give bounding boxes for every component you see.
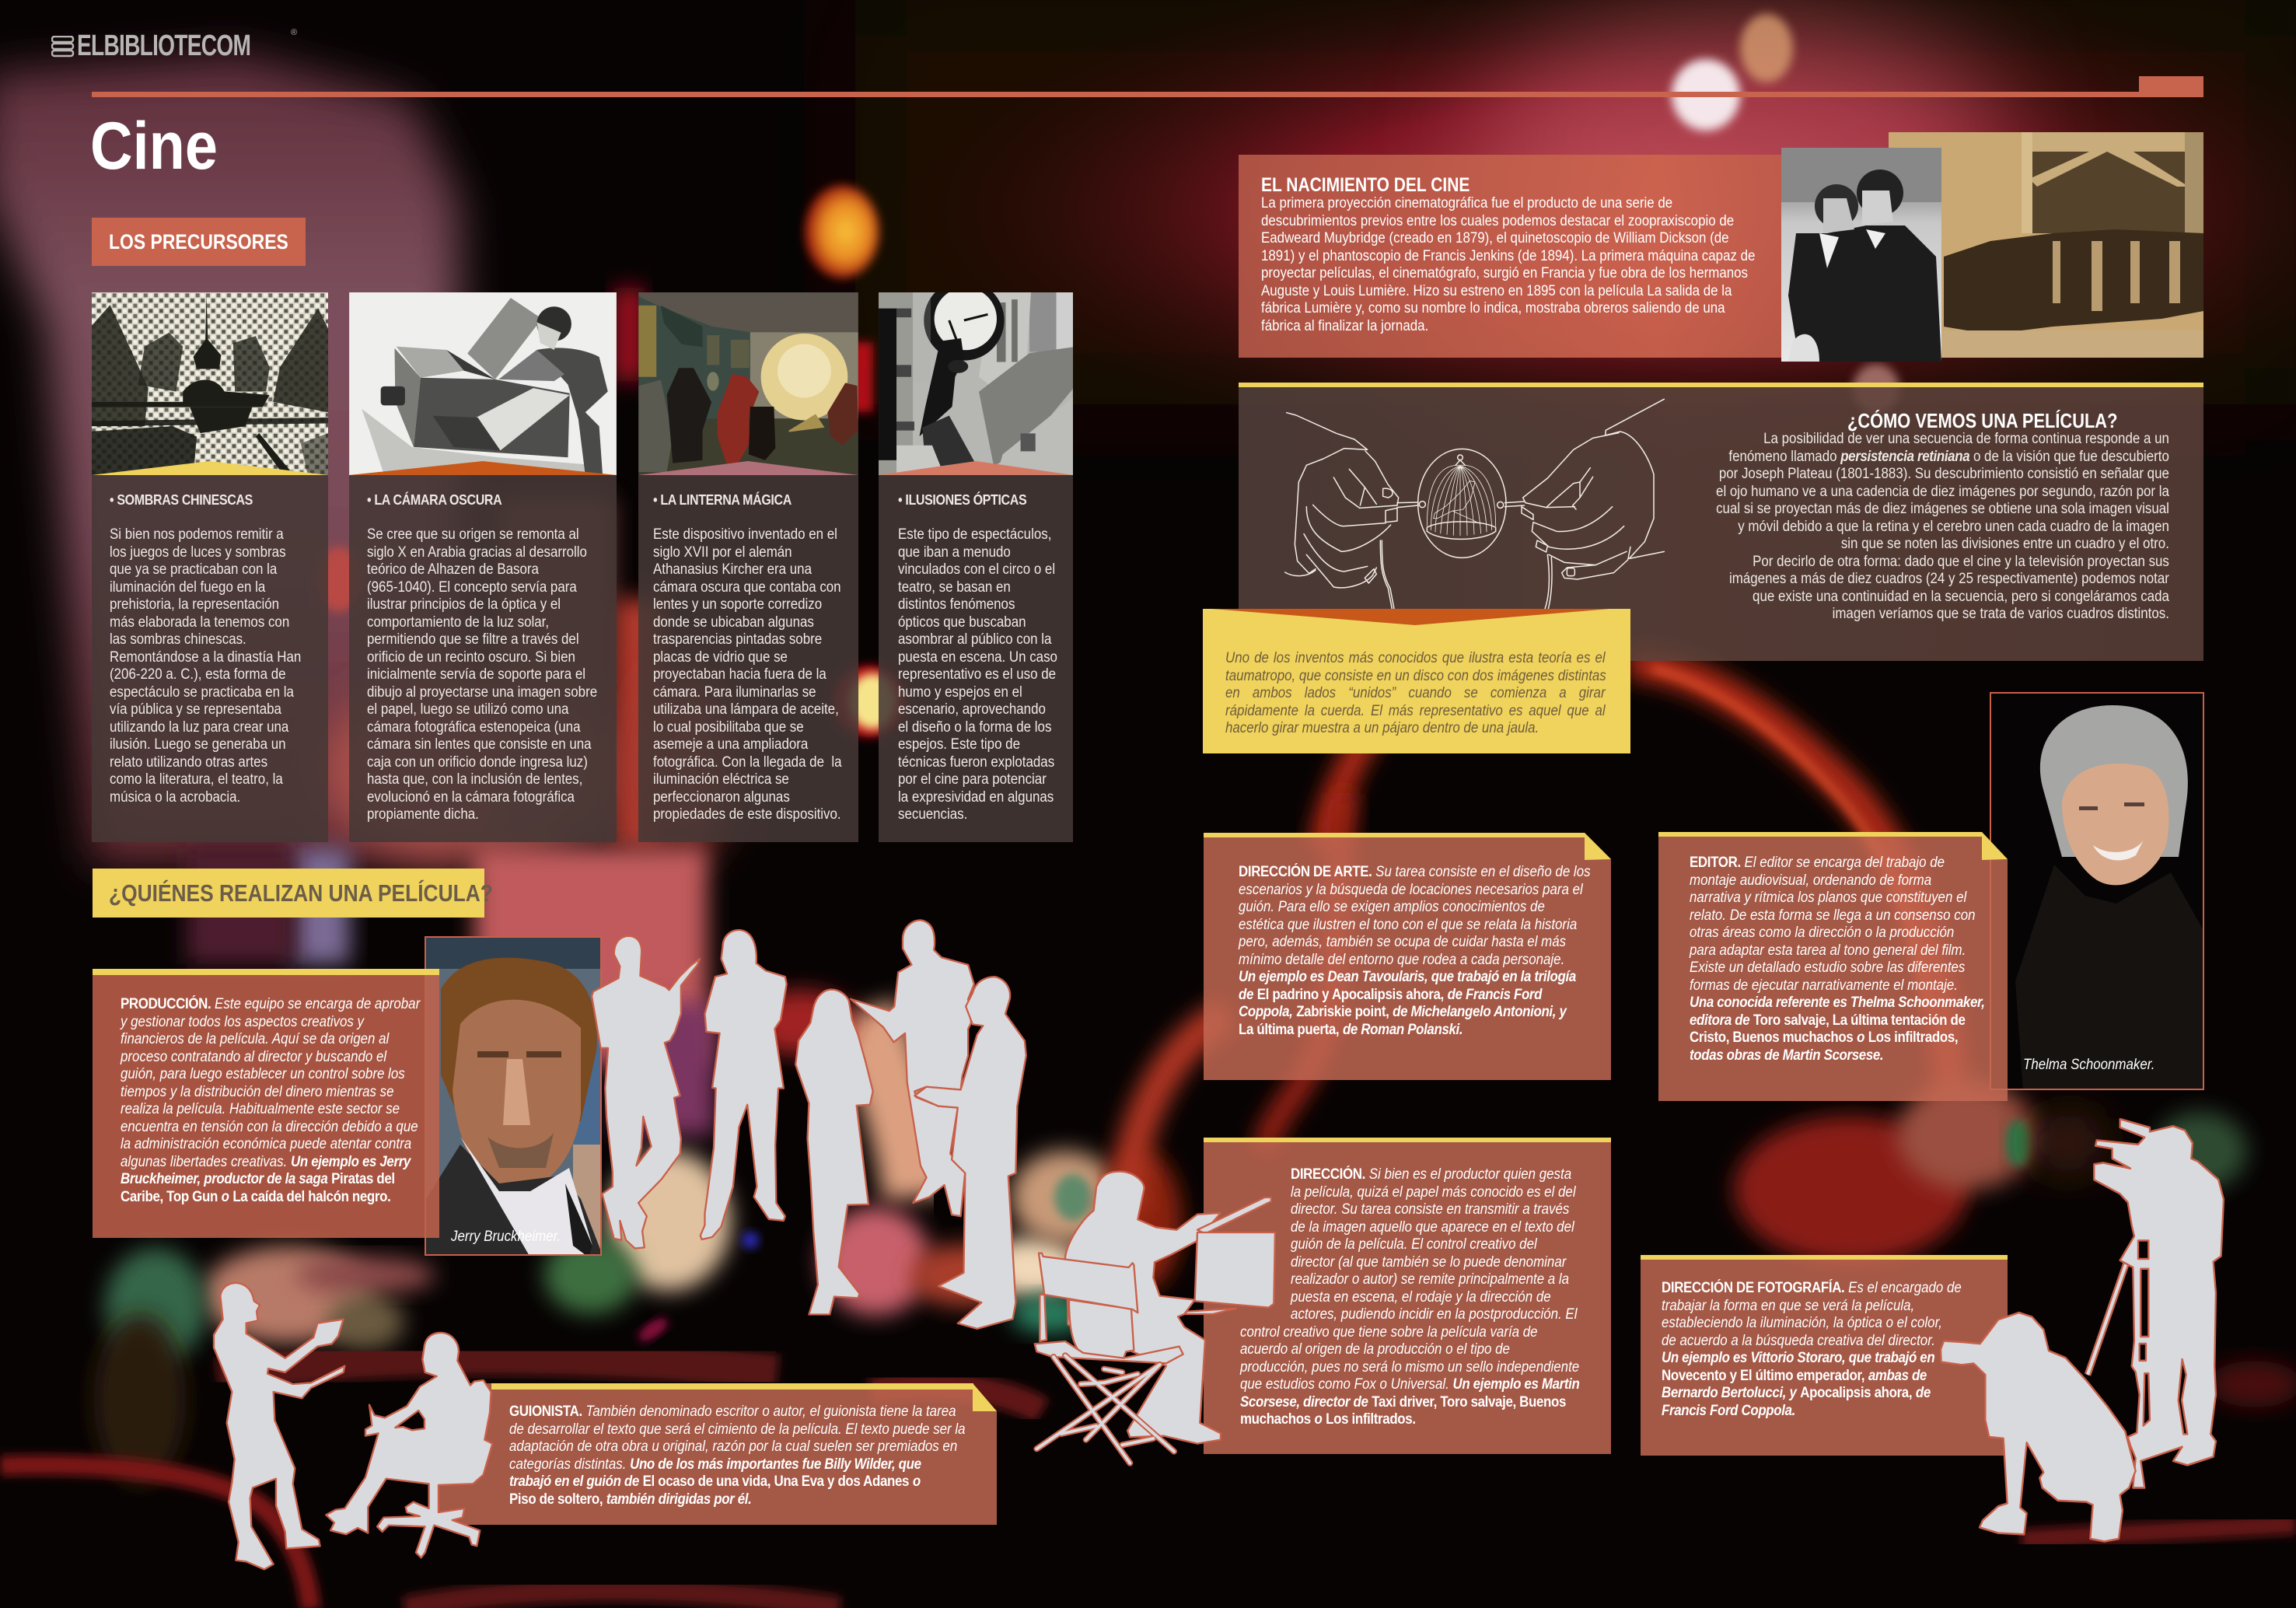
panel: editor: otras áreas como la dirección o la producción [1690,925,1954,941]
logo: ® [291,28,297,37]
heading: quiénes realizan una película [93,869,484,918]
panel: ilusiones ópticas: la expresividad en algunas [898,788,1054,806]
panel: la cámara oscura: evolucionó en la cámara fotográfica [367,788,575,806]
panel: ilusiones ópticas [879,292,1073,842]
panel: la cámara oscura: teórico de Alhazen de Basora [367,561,539,578]
panel: la cámara oscura: propiamente dicha. [367,806,479,823]
panel: la linterna mágica: asemeje a una ampliadora [653,736,808,753]
panel: sombras chinescas: (206-220 a. C.), esta forma de [110,666,286,683]
panel: guionista: adaptación de otra obra u original, razón por la cual suelen ser premiados en [509,1438,957,1455]
image: ilusiones ópticas [879,292,1073,475]
panel: el nacimiento del cine: proyectar películas, el cinematógrafo, surgió en Francia y fue obra de los hermanos [1261,265,1748,281]
panel: editor [1658,832,2008,1101]
panel: la cámara oscura: hasta que, con la inclusión de lentes, [367,771,582,788]
panel: la linterna mágica: lentes y un soporte corredizo [653,596,822,613]
panel: editor: formas de ejecutar narrativamente el montaje. [1690,977,1958,994]
photo: hermanos Lumière [1781,148,1941,362]
panel: dirección de arte: DIRECCIÓN DE ARTE. Su tarea consiste en el diseño de los [1239,864,1591,880]
panel: ilusiones ópticas: Este tipo de espectáculos, [898,526,1051,543]
silhouette: mujer con tableta [214,1283,344,1569]
panel: ilusiones ópticas: • ILUSIONES ÓPTICAS [898,492,1026,508]
panel: la linterna mágica: Athanasius Kircher era una [653,561,812,578]
panel: sombras chinescas [92,292,328,842]
panel: sombras chinescas: las sombras chinescas. [110,631,246,648]
panel: ilusiones ópticas: el diseño o la forma de los [898,718,1051,736]
silhouettes: grupo de cinco personas [592,920,1026,1329]
panel: dirección: puesta en escena, el rodaje y la dirección de [1291,1289,1551,1305]
photo: salida de la fábrica [1889,132,2203,358]
panel: dirección: de la imagen aquello que aparece en el texto del [1291,1219,1574,1235]
photo: Thelma Schoonmaker [1990,692,2204,1090]
panel: el nacimiento del cine: fábrica al finalizar la jornada. [1261,317,1428,334]
panel: cómo vemos una película: fenómeno llamado persistencia retiniana o de la visión que fue descubierto [1728,448,2169,465]
panel: la linterna mágica: cámara oscura que contaba con [653,579,841,596]
callout: taumatropo: Uno de los inventos más conocidos que ilustra esta teoría es el [1225,650,1606,666]
callout: taumatropo [1203,609,1630,753]
panel: el nacimiento del cine: 1891) y el phantoscopio de Francis Jenkins (de 1894). La primera máquina capaz de [1261,247,1755,264]
panel: dirección: DIRECCIÓN. Si bien es el productor quien gesta [1291,1166,1571,1183]
panel: cómo vemos una película: imágenes a más de diez cuadros (24 y 25 respectivamente) podemos notar [1729,571,2169,587]
panel: sombras chinescas: Remontándose a la dinastía Han [110,648,301,666]
panel: dirección: actores, pudiendo incidir en la postproducción. El [1291,1306,1577,1323]
panel: la linterna mágica: siglo XVII por el alemán [653,544,792,560]
panel: dirección de arte: La última puerta, de Roman Polanski. [1239,1022,1463,1037]
panel: cómo vemos una película: Por decirlo de otra forma: dado que el cine y la televisión proyectan sus [1753,554,2169,569]
panel: el nacimiento del cine: Eadweard Muybridge (creado en 1879), el quinetoscopio de William Dickson (de [1261,230,1729,246]
panel: producción: encuentra en tensión con la dirección debido a que [121,1118,418,1135]
panel: ilusiones ópticas: escenario, aprovechando [898,701,1046,718]
panel: la linterna mágica: utilizaba una lámpara de aceite, [653,701,839,718]
panel: producción: la administración económica puede atentar contra [121,1136,411,1152]
panel: la linterna mágica: donde se ubicaban algunas [653,614,814,630]
panel: dirección de fotografía [1641,1255,2008,1456]
panel: sombras chinescas: utilizando la luz para crear una [110,718,288,736]
panel: producción: Bruckheimer, productor de la saga Piratas del [121,1171,395,1187]
panel: el nacimiento del cine: descubrimientos previos entre los cuales podemos destacar el zoopraxiscopio de [1261,213,1734,229]
panel: dirección [1204,1138,1611,1454]
panel: guionista: GUIONISTA. También denominado escritor o autor, el guionista tiene la tarea [509,1404,956,1420]
panel: ilusiones ópticas: humo y espejos en el [898,684,1022,700]
callout: taumatropo: hacerlo girar muestra a un pájaro dentro de una jaula. [1225,720,1539,736]
panel: editor: editora de Toro salvaje, La última tentación de [1690,1012,1965,1028]
heading: quiénes realizan una película: ¿QUIÉNES REALIZAN UNA PELÍCULA? [109,879,493,907]
panel: ilusiones ópticas: espejos. Este tipo de [898,736,1020,753]
panel: cómo vemos una película: el ojo humano ve a una cadencia de diez imágenes por segundo, razón por la [1716,484,2169,499]
silhouette: fotógrafo agachado [1941,1313,2136,1542]
panel: el nacimiento del cine: Auguste y Louis Lumière. Hizo su estreno en 1895 con la película La salida de la [1261,283,1732,299]
panel: dirección: realizador o autor) se remite principalmente a la [1291,1271,1569,1288]
panel: ilusiones ópticas: asombrar al público con la [898,631,1051,648]
silhouette: director en silla [1035,1172,1275,1463]
panel: la cámara oscura: cámara fotográfica estenopeica (una [367,718,580,736]
panel: dirección: director (al que también se lo puede denominar [1291,1253,1566,1271]
panel: el nacimiento del cine: fábrica Lumière y, como su nombre lo indica, mostraba obreros saliendo de una [1261,300,1725,316]
panel: cómo vemos una película: que existe una continuidad en la secuencia, pero si congeláramos cada [1753,588,2169,605]
panel: la cámara oscura: siglo X en Arabia gracias al desarrollo [367,544,587,560]
panel: dirección de fotografía: DIRECCIÓN DE FOTOGRAFÍA. Es el encargado de [1662,1280,1962,1296]
panel: dirección: la película, quizá el papel más conocido es el del [1291,1183,1576,1201]
heading: los precursores [92,218,306,266]
panel: el nacimiento del cine: La primera proyección cinematográfica fue el producto de una serie de [1261,195,1672,211]
panel: ilusiones ópticas: que iban a menudo [898,544,1011,560]
callout: taumatropo: taumatropo, que consiste en un disco con dos imágenes distintas [1225,667,1606,684]
image: sombras chinescas [92,292,328,475]
panel: dirección de arte: guión. Para ello se exigen amplios conocimientos de [1239,899,1545,915]
panel: dirección: acuerdo al origen de la producción o el tipo de [1240,1341,1510,1358]
heading: los precursores: LOS PRECURSORES [109,230,288,253]
panel: producción: proceso contratando al director y buscando el [121,1048,386,1065]
panel: la cámara oscura: el papel, luego se utilizó como una [367,701,568,718]
panel: guionista: trabajó en el guión de El ocaso de una vida, Una Eva y dos Adanes o [509,1473,921,1490]
panel: editor: todas obras de Martin Scorsese. [1690,1047,1883,1064]
panel: dirección: producción, pues no será lo mismo un sello independiente [1240,1359,1579,1375]
panel: dirección de arte: Un ejemplo es Dean Tavoularis, que trabajó en la trilogía [1239,969,1576,985]
panel: ilusiones ópticas: teatro, se basan en [898,579,1011,596]
panel: sombras chinescas: música o la acrobacia. [110,788,240,806]
panel: producción: y gestionar todos los aspectos creativos y [121,1014,364,1029]
panel: dirección de fotografía: estableciendo la iluminación, la óptica o el color, [1662,1315,1942,1331]
panel: sombras chinescas: • SOMBRAS CHINESCAS [110,492,253,508]
panel: sombras chinescas: que ya se practicaban con la [110,561,277,578]
panel: la linterna mágica: cámara. Para iluminarlas se [653,684,816,700]
panel: producción: PRODUCCIÓN. Este equipo se encarga de aprobar [121,996,420,1012]
panel: sombras chinescas: ilusión. Luego se generaba un [110,736,286,753]
panel: ilusiones ópticas: por el cine para potenciar [898,771,1047,788]
panel: ilusiones ópticas: técnicas fueron explotadas [898,754,1054,770]
title: Cine [90,109,218,184]
panel: dirección de arte: pero, además, también se ocupa de cuidar hasta el más [1239,934,1566,950]
panel: la linterna mágica: iluminación eléctrica se [653,771,789,788]
panel: la linterna mágica: • LA LINTERNA MÁGICA [653,492,792,508]
logo: ELBIBLIOTECOM [77,30,250,62]
panel: dirección de fotografía: Bernardo Bertolucci, y Apocalipsis ahora, de [1662,1385,1931,1401]
panel: producción: algunas libertades creativas. Un ejemplo es Jerry [121,1154,411,1169]
panel: sombras chinescas: iluminación del fuego en la [110,579,265,596]
panel: cómo vemos una película: imagen veríamos que se trata de varios cuadros distintos. [1833,606,2169,622]
panel: guionista: de desarrollar el texto que será el cimiento de la película. El texto puede ser la [509,1421,966,1437]
panel: cómo vemos una película: y móvil debido a que la retina y el cerebro unen cada cuadro de la imagen [1738,518,2169,535]
panel: editor: narrativa y rítmica los planos que constituyen el [1690,890,1966,906]
panel: cómo vemos una película: cual si se proyectan más de diez imágenes se obtiene una sola imagen visual [1716,501,2169,517]
panel: la cámara oscura: Se cree que su origen se remonta al [367,526,579,543]
panel: ilusiones ópticas: distintos fenómenos [898,596,1015,613]
image: linterna mágica [638,292,858,475]
panel: dirección: muchachos o Los infiltrados. [1240,1411,1416,1428]
panel: producción [93,969,439,1238]
icon: taumatropo manos [1244,389,1679,609]
panel: la linterna mágica: proyectaban hacia fuera de la [653,666,826,683]
panel: sombras chinescas: espectáculo se practicaba en la [110,684,294,700]
callout: taumatropo: en ambos lados “unidos” cuando se comienza a girar [1225,685,1606,701]
panel: la cámara oscura: permitiendo que se filtre a través del [367,631,579,648]
panel: cómo vemos una película [1239,383,2203,661]
panel: guionista [439,1383,997,1525]
panel: la cámara oscura [349,292,617,842]
panel: guionista: categorías distintas. Uno de los más importantes fue Billy Wilder, que [509,1456,921,1473]
panel: el nacimiento del cine [1239,155,1798,358]
panel: dirección de fotografía: trabajar la forma en que se verá la película, [1662,1297,1914,1314]
panel: editor: Existe un detallado estudio sobre las diferentes [1690,960,1965,976]
panel: sombras chinescas: relato utilizando otras artes [110,754,267,770]
photo: Jerry Bruckheimer: Jerry Bruckheimer. [451,1229,561,1245]
photo: Jerry Bruckheimer [425,936,602,1256]
panel: sombras chinescas: vía pública y se representaba [110,701,281,718]
panel: ilusiones ópticas: representativo es el uso de [898,666,1056,683]
panel: dirección: director. Su tarea consiste en transmitir a través [1291,1201,1569,1218]
panel: ilusiones ópticas: vinculados con el circo o el [898,561,1055,578]
panel: la linterna mágica: lo cual posibilitaba que se [653,718,804,736]
panel: editor: para adaptar esta tarea al tono general del film. [1690,942,1966,958]
panel: dirección de arte: estética que ilustren el tono con el que se relata la historia [1239,916,1577,933]
panel: la cámara oscura: ilustrar principios de la óptica y el [367,596,561,613]
panel: la cámara oscura: (965-1040). El concepto servía para [367,579,577,596]
panel: la cámara oscura: dibujo al proyectarse una imagen sobre [367,684,597,700]
panel: dirección de fotografía: de acuerdo a la búsqueda creativa del director. [1662,1333,1935,1348]
panel: dirección: Scorsese, director de Taxi driver, Toro salvaje, Buenos [1240,1393,1566,1410]
logo [51,28,297,62]
panel: cómo vemos una película: La posibilidad de ver una secuencia de forma continua responde a un [1763,431,2169,447]
silhouette: camarógrafo con trípode [2088,1119,2224,1487]
panel: la cámara oscura: caja con un orificio donde ingresa luz) [367,754,588,770]
panel: editor: Cristo, Buenos muchachos o Los infiltrados, [1690,1029,1958,1046]
panel: la linterna mágica: placas de vidrio que se [653,648,788,666]
panel: la linterna mágica: propiedades de este dispositivo. [653,806,841,823]
panel: producción: financieros de la película. Aquí se da origen al [121,1031,389,1047]
callout: taumatropo: rápidamente la cuerda. El más representativo es aquel que al [1225,703,1606,718]
image: cámara oscura [349,292,617,475]
panel: la linterna mágica: trasparencias pintadas sobre [653,631,822,648]
panel: la linterna mágica: fotográfica. Con la llegada de la [653,754,842,770]
panel: dirección de arte [1204,833,1611,1080]
panel: editor: montaje audiovisual, ordenando de forma [1690,872,1931,888]
panel: dirección: guión de la película. El control creativo del [1291,1236,1537,1253]
panel: guionista: Piso de soltero, también dirigidas por él. [509,1491,751,1507]
panel: editor: relato. De esta forma se llega a un consenso con [1690,907,1976,924]
panel: dirección de arte: mínimo detalle del entorno que rodea a cada personaje. [1239,952,1564,967]
silhouette: mujer sentada en silla [326,1333,492,1557]
panel: dirección de arte: de El padrino y Apocalipsis ahora, de Francis Ford [1239,986,1542,1003]
panel: la linterna mágica: perfeccionaron algunas [653,788,790,806]
panel: dirección de fotografía: Novecento y El último emperador, ambas de [1662,1367,1927,1384]
panel: la cámara oscura: inicialmente servía de soporte para el [367,666,585,683]
panel: producción: realiza la película. Habitualmente este sector se [121,1101,400,1117]
panel: la linterna mágica: Este dispositivo inventado en el [653,526,837,543]
panel: sombras chinescas: como la literatura, el teatro, la [110,771,283,788]
panel: la cámara oscura: orificio de un recinto oscuro. Si bien [367,648,575,666]
panel: dirección de arte: Coppola, Zabriskie point, de Michelangelo Antonioni, y [1239,1004,1567,1020]
panel: dirección: que estudios como Fox o Universal. Un ejemplo es Martin [1240,1376,1579,1393]
hair arcs right [1629,662,1952,1197]
panel: producción: guión, para luego establecer un control sobre los [121,1066,405,1082]
panel: cómo vemos una película: sin que se noten las divisiones entre un cuadro y el otro. [1841,536,2169,552]
panel: editor: EDITOR. El editor se encarga del trabajo de [1690,855,1945,871]
panel: la linterna mágica [638,292,858,842]
panel: ilusiones ópticas: secuencias. [898,806,967,823]
top rule with tab [92,76,2203,97]
panel: dirección: control creativo que tiene sobre la película varía de [1240,1323,1538,1341]
panel: dirección de fotografía: Francis Ford Coppola. [1662,1403,1795,1418]
bottom-left blobs [474,848,708,1065]
panel: ilusiones ópticas: ópticos que buscaban [898,614,1026,630]
panel: la cámara oscura: comportamiento de la luz solar, [367,614,549,630]
panel: producción: Caribe, Top Gun o La caída del halcón negro. [121,1188,390,1205]
panel: ilusiones ópticas: puesta en escena. Un caso [898,648,1057,666]
panel: dirección de fotografía: Un ejemplo es Vittorio Storaro, que trabajó en [1662,1350,1934,1366]
panel: la cámara oscura: • LA CÁMARA OSCURA [367,492,501,508]
panel: dirección de arte: escenarios y la búsqueda de locaciones necesarios para el [1239,882,1583,897]
panel: producción: tiempos y la distribución del dinero mientras se [121,1084,394,1099]
panel: sombras chinescas: Si bien nos podemos remitir a [110,526,284,543]
panel: cómo vemos una película: ¿CÓMO VEMOS UNA PELÍCULA? [1847,409,2118,432]
panel: la cámara oscura: cámara sin lentes que consiste en una [367,736,592,753]
panel: sombras chinescas: más elaborada la tenemos con [110,614,289,630]
panel: sombras chinescas: prehistoria, la representación [110,596,279,613]
photo: Thelma Schoonmaker: Thelma Schoonmaker. [2023,1057,2154,1073]
panel: sombras chinescas: los juegos de luces y sombras [110,544,286,560]
panel: cómo vemos una película: por Joseph Plateau (1801-1883). Su descubrimiento consistió en señalar que [1719,466,2169,482]
panel: editor: Una conocida referente es Thelma Schoonmaker, [1690,995,1985,1011]
panel: el nacimiento del cine: EL NACIMIENTO DEL CINE [1261,174,1470,196]
